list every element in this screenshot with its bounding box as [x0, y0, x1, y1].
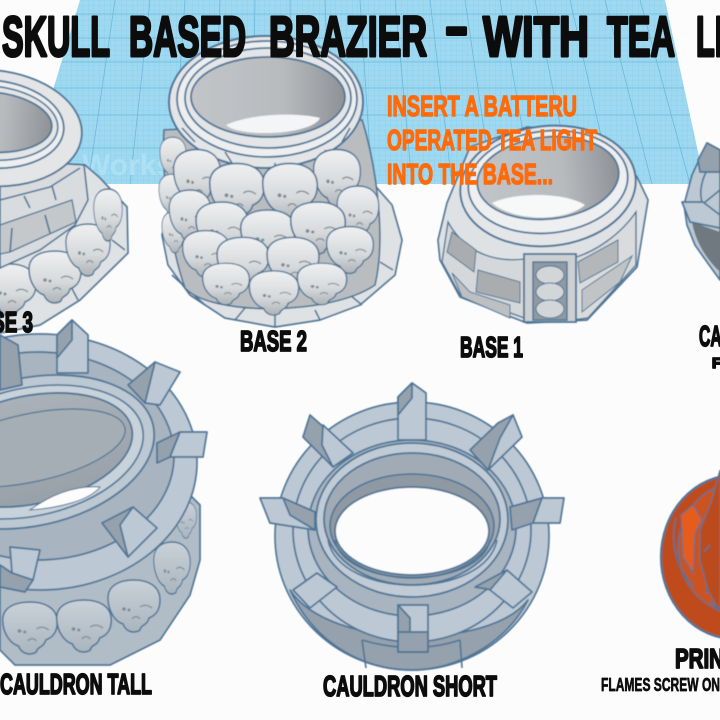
object: cauldron short [260, 383, 564, 670]
instruction callout [387, 91, 597, 191]
title: BRAZIER [269, 5, 427, 69]
base 2 top rim [169, 36, 363, 168]
label: cauldron short: CAULDRON SHORT [323, 671, 497, 703]
base 1 floor [492, 195, 585, 218]
base 2 floor [226, 115, 320, 133]
title: SKULL [2, 5, 110, 69]
blue workplane grid [47, 0, 705, 184]
base 2 flange [162, 180, 402, 327]
base 3 rim [0, 62, 87, 194]
short outer ring [275, 402, 549, 670]
tall outer ring [0, 334, 197, 590]
base 1 outer shell [438, 127, 648, 323]
base 2 body [164, 120, 380, 309]
object: base 3 [0, 62, 128, 333]
instruction callout: OPERATED TEA LIGHT [387, 125, 597, 157]
object: cauldron tall [0, 320, 207, 665]
flames body [700, 470, 720, 612]
label: base 1: BASE 1 [460, 332, 523, 364]
tall spikes [0, 320, 207, 592]
short bottom segments [362, 640, 462, 668]
object: base 2 [159, 36, 402, 327]
base 3 bricks [0, 160, 88, 268]
base 3 flange [0, 160, 128, 333]
short lower lip [328, 540, 497, 585]
tall skull band [0, 490, 200, 665]
short spikes [260, 383, 564, 652]
title: BASED [129, 5, 246, 69]
base 2 skulls [159, 137, 379, 315]
base 1 skull panel [524, 254, 576, 322]
flames bright panel [681, 505, 702, 573]
title: WITH [483, 5, 589, 69]
short inner rims [316, 443, 508, 597]
instruction callout: INSERT A BATTERU [387, 91, 577, 123]
base 1 brick band [442, 222, 530, 320]
label: base 2: BASE 2 [240, 326, 307, 358]
label: cauldron tall: CAULDRON TALL [0, 669, 152, 701]
object: cauldron partly off the right edge [682, 143, 720, 280]
tall hole [30, 487, 100, 510]
watermark: Works: Works [82, 149, 173, 182]
instruction callout: INTO THE BASE... [387, 159, 553, 191]
base 3 skulls [0, 189, 122, 316]
base 1 rim [454, 117, 642, 255]
object: base 1 [438, 117, 648, 323]
object: printed flames [661, 470, 720, 639]
title [2, 0, 720, 69]
title: TEA [607, 5, 675, 69]
short hole [335, 487, 489, 575]
tall inner rims [0, 353, 169, 551]
